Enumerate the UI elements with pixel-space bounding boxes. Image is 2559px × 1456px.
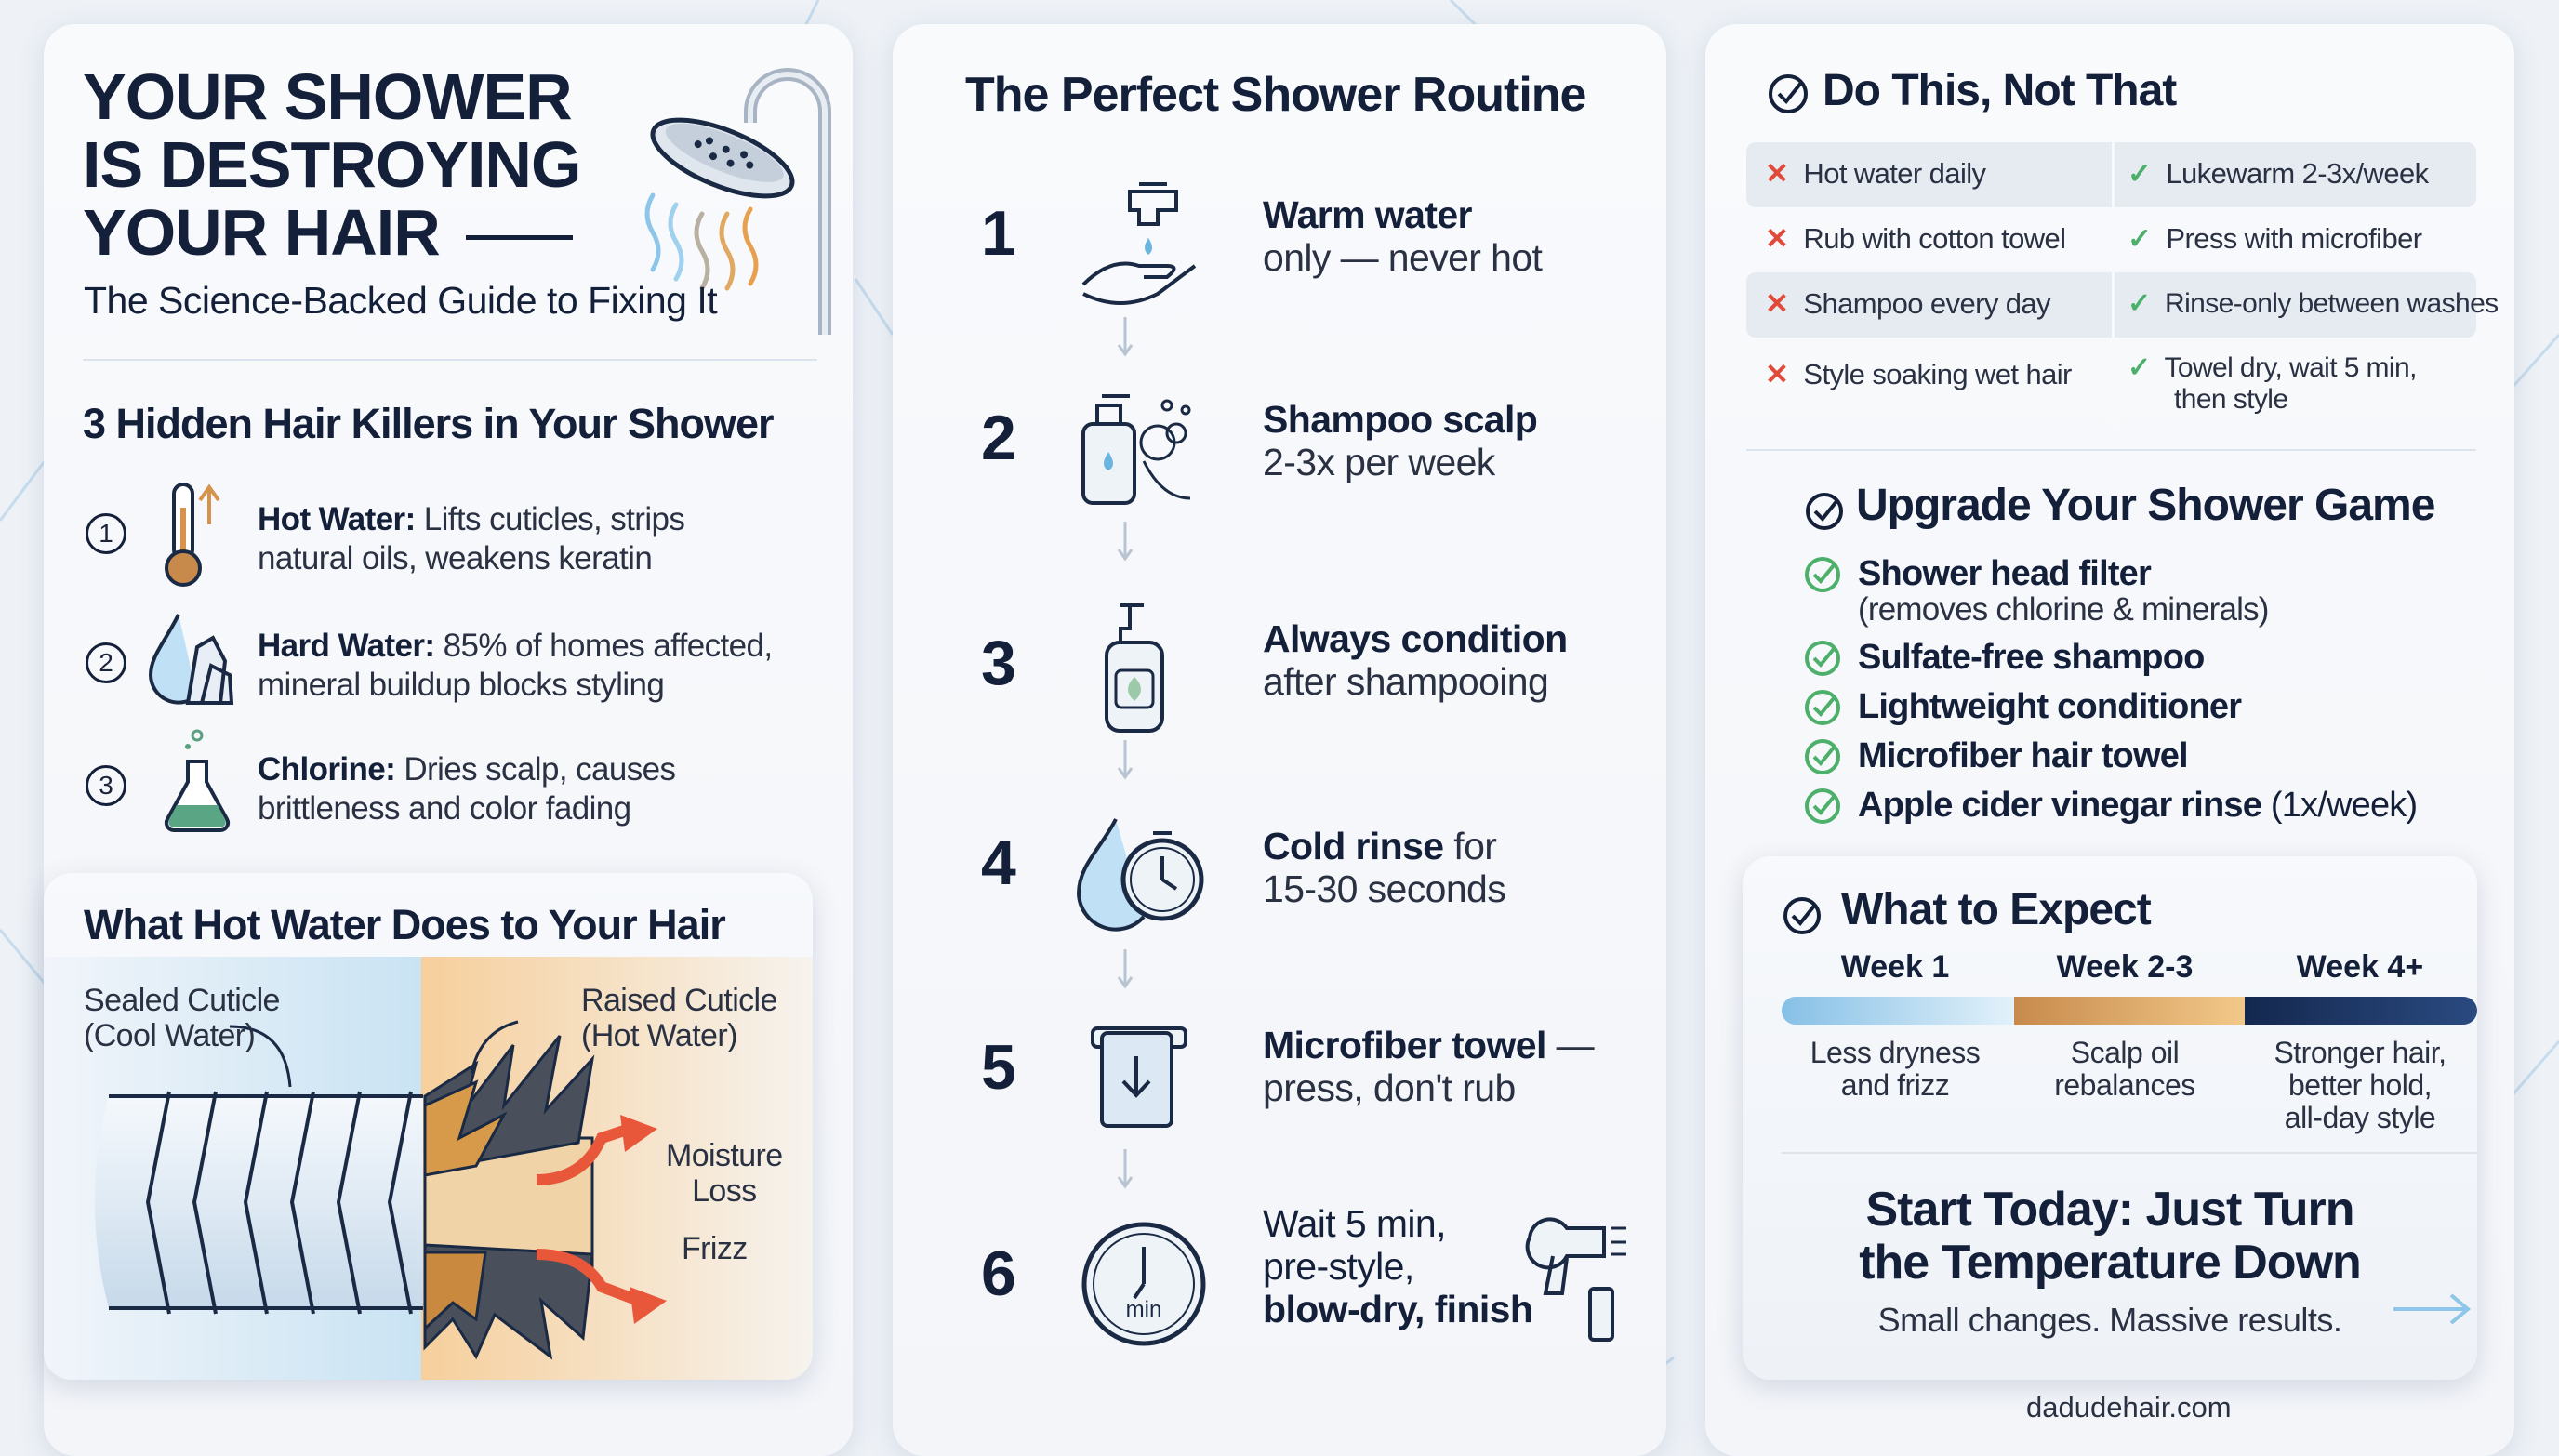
footer url: dadudehair.com bbox=[2026, 1391, 2232, 1423]
item: hot water: Hot Water: Lifts cuticles, strips bbox=[258, 501, 684, 537]
timeline: all-day style bbox=[2285, 1101, 2435, 1134]
icon: shampoo bottle bbox=[1081, 394, 1190, 505]
panel: left bbox=[44, 24, 853, 1456]
card: what hot water does: Raised Cuticle bbox=[581, 983, 777, 1018]
timeline: and frizz bbox=[1841, 1068, 1949, 1102]
item: hard water bbox=[86, 614, 772, 705]
damaged side bbox=[425, 1138, 592, 1268]
comparison table: ✓ Press with microfiber bbox=[2128, 222, 2421, 255]
comparison table: ✓ Lukewarm 2-3x/week bbox=[2128, 157, 2429, 190]
comparison table: then style bbox=[2174, 384, 2287, 415]
title: YOUR SHOWER bbox=[83, 60, 572, 133]
comparison table: ✓ Towel dry, wait 5 min, bbox=[2128, 352, 2417, 383]
comparison table: ✓ Rinse-only between washes bbox=[2128, 288, 2499, 319]
item: hot water bbox=[86, 483, 684, 587]
heading: 3 hidden killers: 3 Hidden Hair Killers in Your Shower bbox=[83, 400, 774, 447]
item: hard water: Hard Water: 85% of homes affected, bbox=[258, 628, 772, 664]
item: hot water: 1 bbox=[99, 519, 113, 548]
item: hard water: mineral buildup blocks styling bbox=[258, 667, 664, 703]
timeline: Stronger hair, bbox=[2274, 1036, 2446, 1069]
upgrade list: Sulfate-free shampoo bbox=[1858, 638, 2205, 677]
icon: clock bbox=[1082, 1222, 1205, 1346]
step 1: Warm water bbox=[1263, 193, 1472, 236]
timeline: Week 1 bbox=[1841, 949, 1949, 985]
step 6: Wait 5 min, bbox=[1263, 1202, 1446, 1245]
icon: towel bbox=[1091, 1026, 1187, 1128]
panel: right bbox=[1705, 24, 2514, 1456]
step 6: 6 bbox=[981, 1238, 1016, 1309]
callout: start today: Small changes. Massive results. bbox=[1878, 1301, 2341, 1339]
card: what hot water does: Frizz bbox=[682, 1231, 748, 1266]
step 4: 15-30 seconds bbox=[1263, 867, 1505, 910]
card: what hot water does: Loss bbox=[692, 1173, 757, 1209]
card: what to expect bbox=[1743, 856, 2477, 1380]
item: chlorine: brittleness and color fading bbox=[258, 790, 631, 827]
upgrade list bbox=[1805, 554, 2417, 825]
icon: shower head bbox=[645, 68, 831, 335]
title: IS DESTROYING bbox=[83, 128, 580, 201]
step 3: 3 bbox=[981, 628, 1016, 698]
subtitle: The Science-Backed Guide to Fixing It bbox=[84, 279, 717, 322]
icon: drop and crystals bbox=[149, 614, 234, 705]
step 5 bbox=[981, 1024, 1595, 1128]
icon: clock: min bbox=[1126, 1297, 1161, 1322]
card: what hot water does: (Hot Water) bbox=[581, 1018, 737, 1053]
icon: faucet hand bbox=[1082, 182, 1196, 305]
labels bbox=[84, 983, 280, 1053]
step 3: Always condition bbox=[1263, 617, 1568, 660]
upgrade list: Apple cider vinegar rinse (1x/week) bbox=[1858, 786, 2417, 825]
arrows between steps bbox=[1118, 317, 1133, 1188]
upgrade list: (removes chlorine & minerals) bbox=[1858, 591, 2269, 628]
step 3 bbox=[981, 603, 1568, 733]
item: hard water: 2 bbox=[99, 648, 113, 677]
timeline: Week 2-3 bbox=[2057, 949, 2193, 985]
timeline: better hold, bbox=[2288, 1068, 2432, 1102]
step 2: 2-3x per week bbox=[1263, 441, 1495, 483]
heading: do this not that: Do This, Not That bbox=[1823, 66, 2176, 115]
step 4 bbox=[981, 818, 1505, 932]
arrow bbox=[2393, 1294, 2471, 1324]
item: chlorine bbox=[86, 729, 675, 832]
upgrade list: Shower head filter bbox=[1858, 554, 2151, 593]
step 1: 1 bbox=[981, 198, 1016, 269]
timeline: Week 4+ bbox=[2297, 949, 2423, 985]
step 2: 2 bbox=[981, 403, 1016, 473]
step 5: press, don't rub bbox=[1263, 1066, 1516, 1109]
step 6: pre-style, bbox=[1263, 1245, 1414, 1288]
icon: thermometer bbox=[165, 483, 220, 587]
title: YOUR HAIR bbox=[83, 196, 440, 269]
heading: upgrade: Upgrade Your Shower Game bbox=[1856, 481, 2434, 530]
heading: What Hot Water Does to Your Hair bbox=[84, 901, 725, 948]
card: what hot water does: Moisture bbox=[666, 1138, 783, 1173]
step 2: Shampoo scalp bbox=[1263, 398, 1537, 441]
step 5: Microfiber towel — bbox=[1263, 1024, 1594, 1066]
item: chlorine: 3 bbox=[99, 771, 113, 800]
step 4: 4 bbox=[981, 827, 1016, 898]
item: hot water: natural oils, weakens keratin bbox=[258, 540, 652, 576]
timeline: rebalances bbox=[2054, 1068, 2195, 1102]
icon: flask bbox=[164, 729, 231, 832]
comparison table: ✕ Shampoo every day bbox=[1765, 287, 2050, 320]
illustration: hair cuticle comparison bbox=[78, 957, 813, 1380]
step 6 bbox=[981, 1202, 1626, 1346]
timeline: Scalp oil bbox=[2071, 1036, 2179, 1069]
step 1: only — never hot bbox=[1263, 236, 1542, 279]
arrows bbox=[537, 1129, 639, 1301]
cylinder bbox=[95, 1096, 423, 1308]
timeline bbox=[1782, 949, 2477, 1134]
heading: What to Expect bbox=[1841, 885, 2151, 934]
item: chlorine: Chlorine: Dries scalp, causes bbox=[258, 751, 675, 788]
comparison table: ✕ Hot water daily bbox=[1765, 157, 1985, 190]
panel: routine bbox=[893, 24, 1666, 1456]
step 5: 5 bbox=[981, 1032, 1016, 1103]
heading: The Perfect Shower Routine bbox=[965, 68, 1585, 122]
icon: conditioner bottle bbox=[1105, 603, 1164, 733]
title bbox=[83, 60, 580, 269]
comparison table: ✕ Style soaking wet hair bbox=[1765, 358, 2072, 390]
step 3: after shampooing bbox=[1263, 660, 1548, 703]
timeline: Less dryness bbox=[1810, 1036, 1980, 1069]
step 6: blow-dry, finish bbox=[1263, 1288, 1532, 1330]
step 4: Cold rinse for bbox=[1263, 825, 1496, 867]
callout: start today bbox=[1859, 1183, 2471, 1339]
step 1 bbox=[981, 182, 1543, 305]
labels: Sealed Cuticle bbox=[84, 983, 280, 1018]
step 2 bbox=[981, 394, 1537, 505]
comparison table bbox=[1746, 142, 2499, 415]
comparison table: ✕ Rub with cotton towel bbox=[1765, 222, 2065, 255]
upgrade list: Lightweight conditioner bbox=[1858, 687, 2241, 726]
icon: hair dryer bbox=[1525, 1217, 1626, 1342]
callout: start today: the Temperature Down bbox=[1859, 1236, 2361, 1290]
labels: (Cool Water) bbox=[84, 1018, 255, 1053]
icon: drop stopwatch bbox=[1077, 818, 1203, 932]
upgrade list: Microfiber hair towel bbox=[1858, 736, 2188, 775]
card: what hot water does bbox=[44, 873, 813, 1380]
callout: start today: Start Today: Just Turn bbox=[1865, 1183, 2354, 1237]
